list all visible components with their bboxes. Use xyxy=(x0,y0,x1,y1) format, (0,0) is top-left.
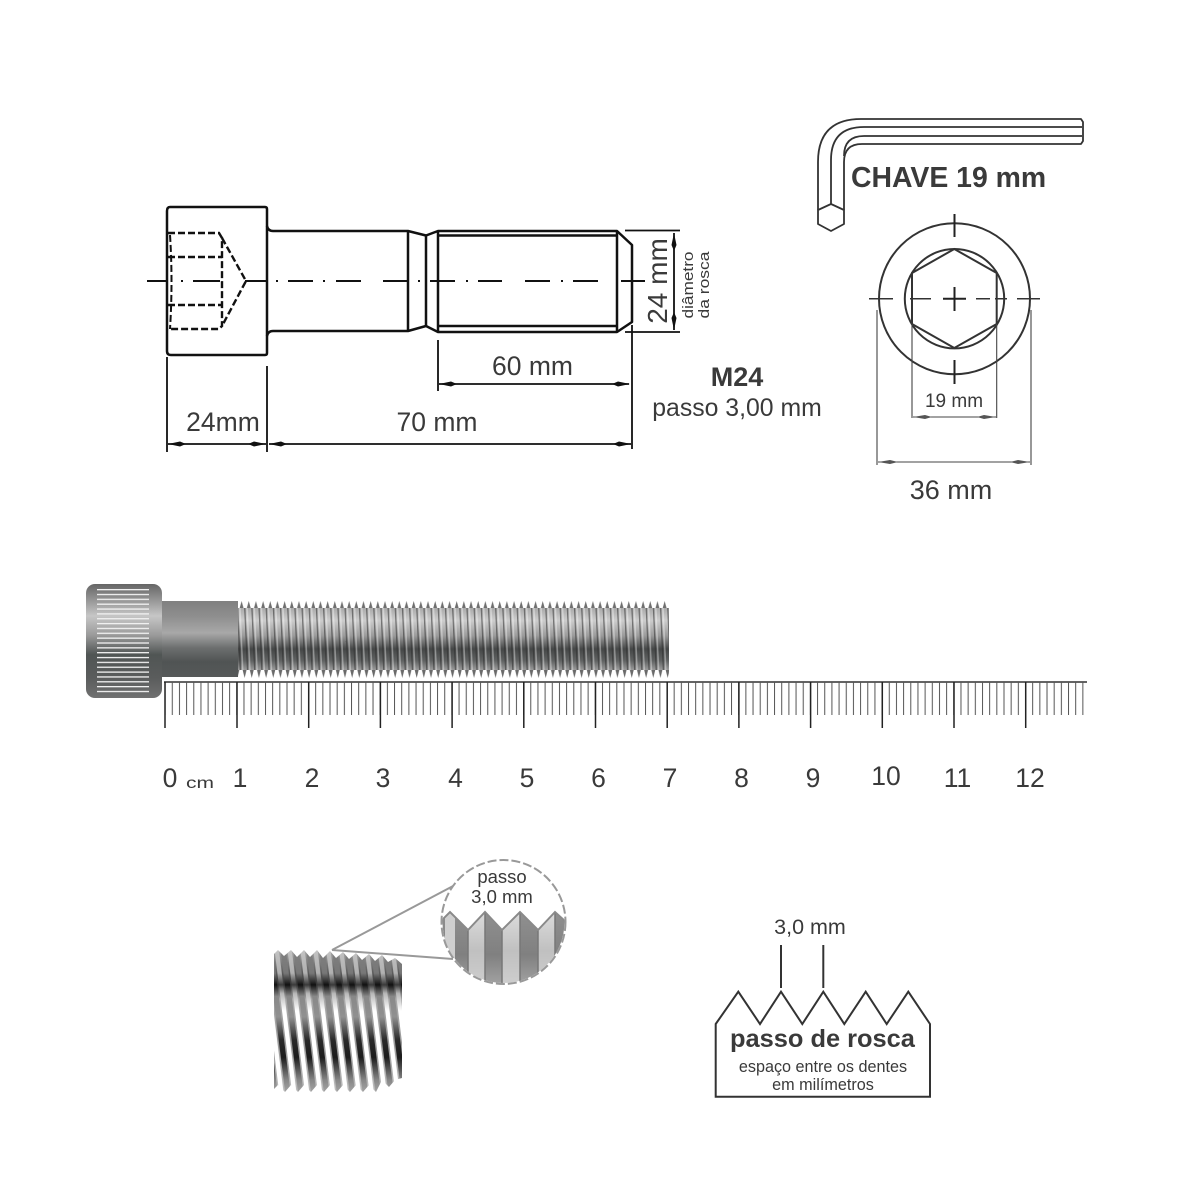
specification text: M24 xyxy=(652,362,822,422)
ruler labels: 2 xyxy=(305,763,319,793)
ruler labels: cm xyxy=(186,775,214,792)
bolt outline xyxy=(167,207,632,355)
dimension: 24mm head xyxy=(167,357,267,452)
ruler labels: 8 xyxy=(734,763,749,793)
dimension: 24 mm thread diameter: da rosca xyxy=(696,251,713,318)
magnifier leader lines xyxy=(332,885,455,959)
dimension: 60 mm thread xyxy=(438,340,630,391)
dimension: 60 mm thread: 60 mm xyxy=(492,351,573,381)
specification text: M24: passo 3,00 mm xyxy=(652,395,822,422)
ruler labels: 12 xyxy=(1015,763,1045,793)
dimension: 19 mm across flats xyxy=(912,324,997,419)
ruler labels: 7 xyxy=(663,763,677,793)
ruler labels: 9 xyxy=(806,763,820,793)
dimension: 70 mm length: 70 mm xyxy=(396,407,478,437)
icon: hex key xyxy=(818,119,1083,231)
socket end view xyxy=(869,214,1040,384)
magnifier lens: passo xyxy=(477,866,527,887)
bolt illustration on ruler xyxy=(86,584,669,698)
ruler xyxy=(163,681,1087,793)
ruler labels: 4 xyxy=(448,763,463,793)
dimension: 24mm head: 24mm xyxy=(186,407,260,437)
magnified thread teeth xyxy=(442,910,564,983)
dimension: 24 mm thread diameter xyxy=(625,230,713,332)
specification text: M24: M24 xyxy=(711,362,763,392)
ruler labels: 1 xyxy=(233,763,247,793)
ruler labels: 3 xyxy=(376,763,390,793)
ruler labels: 0 xyxy=(163,763,177,793)
dimension: 36 mm head diameter xyxy=(877,310,1031,505)
dimension: 70 mm length xyxy=(269,325,632,449)
ruler labels: 10 xyxy=(871,761,901,791)
bolt head xyxy=(86,584,162,698)
hidden socket lines xyxy=(168,233,246,329)
thread pitch diagram xyxy=(716,915,930,1097)
ruler labels xyxy=(163,761,1045,793)
dimension: 36 mm head diameter: 36 mm xyxy=(910,475,992,505)
ruler labels: 5 xyxy=(520,763,534,793)
magnifier lens: 3,0 mm xyxy=(471,886,533,907)
technical drawing: bolt side view xyxy=(147,207,645,355)
centre line xyxy=(147,280,645,282)
ruler labels: 11 xyxy=(944,763,971,793)
thread pitch diagram: em milímetros xyxy=(772,1076,874,1094)
ruler labels: 6 xyxy=(591,763,606,793)
dimension: 24 mm thread diameter: diâmetro xyxy=(680,252,697,318)
label: CHAVE 19 mm: CHAVE 19 mm xyxy=(851,162,1046,194)
magnifier lens xyxy=(440,859,566,985)
thread pitch diagram: passo de rosca xyxy=(730,1025,916,1053)
thread pitch diagram: 3,0 mm xyxy=(774,915,846,939)
thread close-up xyxy=(274,950,402,1092)
dimension: 24 mm thread diameter: 24 mm xyxy=(642,238,673,324)
bolt thread xyxy=(238,601,669,678)
thread pitch diagram: espaço entre os dentes xyxy=(739,1058,907,1076)
bolt shank xyxy=(162,601,238,677)
dimension: 19 mm across flats: 19 mm xyxy=(925,391,983,412)
